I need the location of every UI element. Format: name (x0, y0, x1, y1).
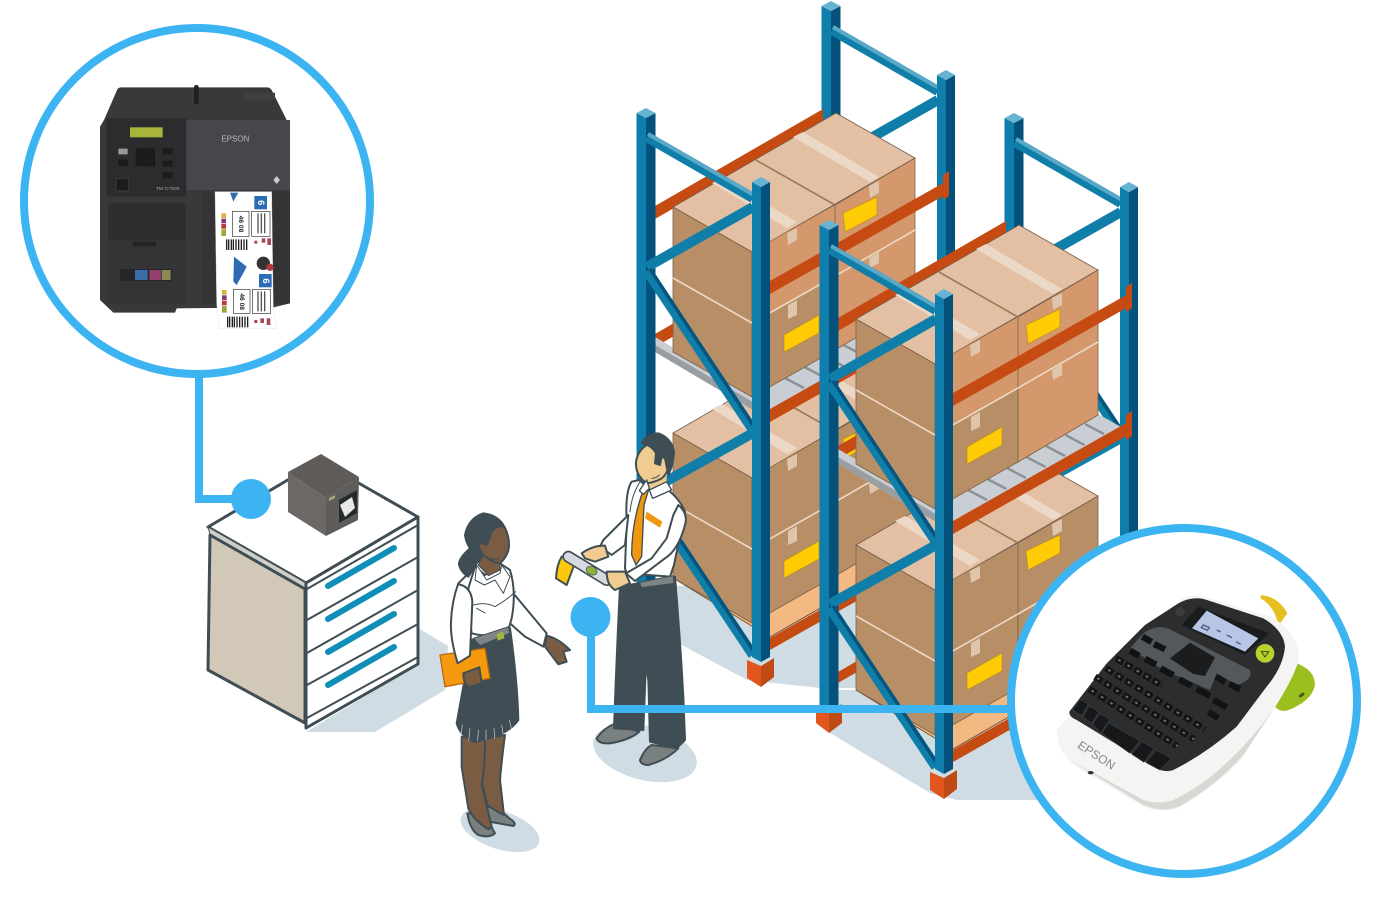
maker brand: EPSON (1075, 738, 1118, 773)
hand on printer (582, 546, 608, 562)
man's legs (597, 577, 685, 765)
white body (1057, 596, 1299, 811)
green wheel (1275, 663, 1315, 711)
hand (545, 636, 570, 664)
badge (645, 512, 662, 528)
neck (478, 555, 500, 576)
near sleeve (451, 568, 474, 663)
bottom row keys (1073, 699, 1172, 770)
hand under printer (607, 572, 630, 590)
near arm (626, 505, 686, 581)
woman's upper body (451, 513, 570, 664)
circle panel: colour label printer (24, 28, 370, 374)
pallet rack, back (633, 1, 959, 687)
collar (475, 565, 510, 593)
handheld label maker (1057, 595, 1315, 811)
face (478, 526, 509, 563)
connector line: label printer (570, 597, 1017, 713)
woman's legs and skirt (457, 628, 518, 836)
man's upper body (556, 433, 686, 590)
d-pad (1170, 643, 1215, 676)
tie (632, 488, 649, 565)
connector line: industrial printer (195, 372, 271, 519)
icon: small printer on cabinet (288, 454, 359, 536)
hair (459, 513, 504, 577)
printed label roll (215, 192, 277, 328)
woman's hand on folder (463, 667, 482, 687)
far arm (510, 593, 547, 647)
ink window (120, 269, 172, 281)
colour label printer: TM-C7500 (156, 186, 180, 192)
printed label roll: 6 (261, 278, 271, 284)
storage cabinet (208, 461, 418, 728)
far arm (600, 515, 628, 555)
head (636, 433, 674, 498)
blouse (468, 563, 514, 635)
printed label roll: 6 (256, 200, 266, 205)
control panel screen (130, 127, 163, 137)
woman's folder (440, 648, 490, 687)
screen (1175, 607, 1274, 663)
grey function band (1130, 627, 1251, 690)
circle panel: handheld label maker (1011, 528, 1357, 874)
handheld label printer (556, 557, 607, 585)
label tape (1261, 595, 1287, 626)
printed label roll: 46 08 (237, 216, 244, 233)
black keypad panel (1069, 598, 1285, 771)
person: man with label printer (556, 433, 686, 765)
colour label printer (100, 85, 290, 328)
colour label printer: EPSON (221, 135, 250, 144)
belt (473, 627, 510, 646)
person: woman with folder (440, 513, 570, 836)
floor shadows (306, 585, 1050, 861)
pallet rack, front (816, 113, 1142, 799)
printed label roll: 46 08 (238, 293, 245, 310)
keyboard keys (1089, 637, 1240, 746)
